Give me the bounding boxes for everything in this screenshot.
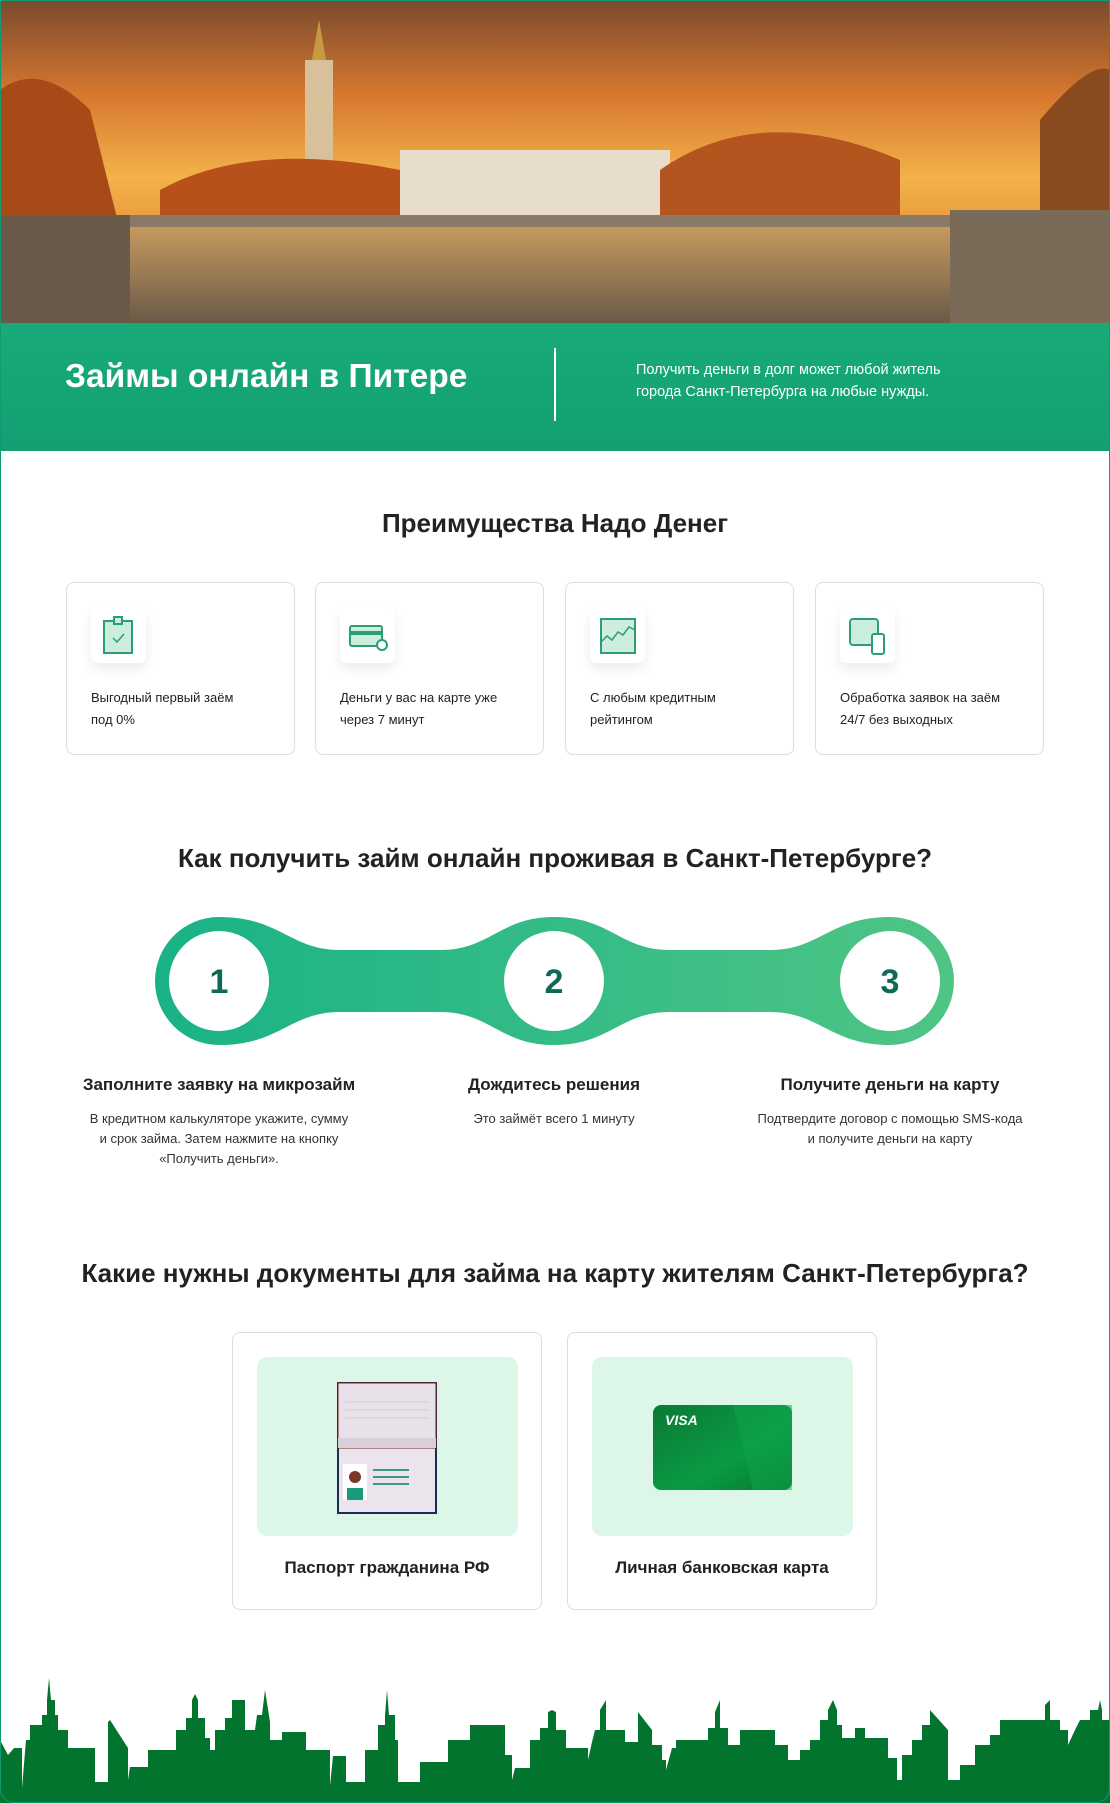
card 1 <box>66 582 295 755</box>
card 2: через 7 минут <box>340 712 424 727</box>
doc card: passport <box>232 1332 542 1610</box>
step 1 text: и срок займа. Затем нажмите на кнопку <box>100 1131 338 1146</box>
card 2: Деньги у вас на карте уже <box>340 690 497 705</box>
step 2 text: Это займёт всего 1 минуту <box>473 1111 635 1126</box>
header band <box>0 323 1110 451</box>
heading: advantages: Преимущества Надо Денег <box>382 508 728 538</box>
step 3 text: Подтвердите договор с помощью SMS-кода <box>757 1111 1023 1126</box>
hero photo <box>1 1 1109 323</box>
card 1: под 0% <box>91 712 135 727</box>
steps band <box>155 917 954 1045</box>
doc card: passport: Паспорт гражданина РФ <box>284 1558 490 1577</box>
title: Займы онлайн в Питере <box>65 358 467 395</box>
header description: города Санкт-Петербурга на любые нужды. <box>636 384 929 400</box>
step 1 text: Заполните заявку на микрозайм <box>83 1075 355 1094</box>
heading: how to get: Как получить займ онлайн проживая в Санкт-Петербурге? <box>178 843 932 873</box>
card 4: 24/7 без выходных <box>840 712 953 727</box>
step circle 2 <box>504 931 604 1031</box>
step circle 3: 3 <box>881 963 899 1001</box>
icon: chart <box>590 608 645 663</box>
icon: visa card <box>653 1405 792 1490</box>
icon: clipboard <box>91 608 146 663</box>
icon: visa card: VISA <box>665 1412 698 1428</box>
doc card: bank card <box>567 1332 877 1610</box>
step 1 text <box>83 1075 355 1166</box>
icon: passport <box>337 1382 437 1514</box>
header description <box>636 362 941 400</box>
step circle 3 <box>840 931 940 1031</box>
skyline <box>0 1678 1110 1803</box>
step circle 1 <box>169 931 269 1031</box>
card 3 <box>565 582 794 755</box>
step 2 text: Дождитесь решения <box>468 1075 640 1094</box>
card 2 <box>315 582 544 755</box>
card 3: С любым кредитным <box>590 690 716 705</box>
heading: documents: Какие нужны документы для займа на карту жителям Санкт-Петербурга? <box>81 1258 1029 1288</box>
step 2 text <box>468 1075 640 1126</box>
card 1: Выгодный первый заём <box>91 690 233 705</box>
doc card: bank card: Личная банковская карта <box>615 1558 829 1577</box>
step 1 text: «Получить деньги». <box>159 1151 279 1166</box>
step 3 text: и получите деньги на карту <box>808 1131 972 1146</box>
step 1 text: В кредитном калькуляторе укажите, сумму <box>90 1111 348 1126</box>
icon: devices <box>840 608 895 663</box>
card 3: рейтингом <box>590 712 653 727</box>
step circle 2: 2 <box>545 963 563 1001</box>
step circle 1: 1 <box>210 963 228 1001</box>
step 3 text <box>757 1075 1023 1146</box>
card 4: Обработка заявок на заём <box>840 690 1000 705</box>
icon: card <box>340 608 395 663</box>
card 4 <box>815 582 1044 755</box>
step 3 text: Получите деньги на карту <box>780 1075 1000 1094</box>
header description: Получить деньги в долг может любой житель <box>636 362 941 378</box>
